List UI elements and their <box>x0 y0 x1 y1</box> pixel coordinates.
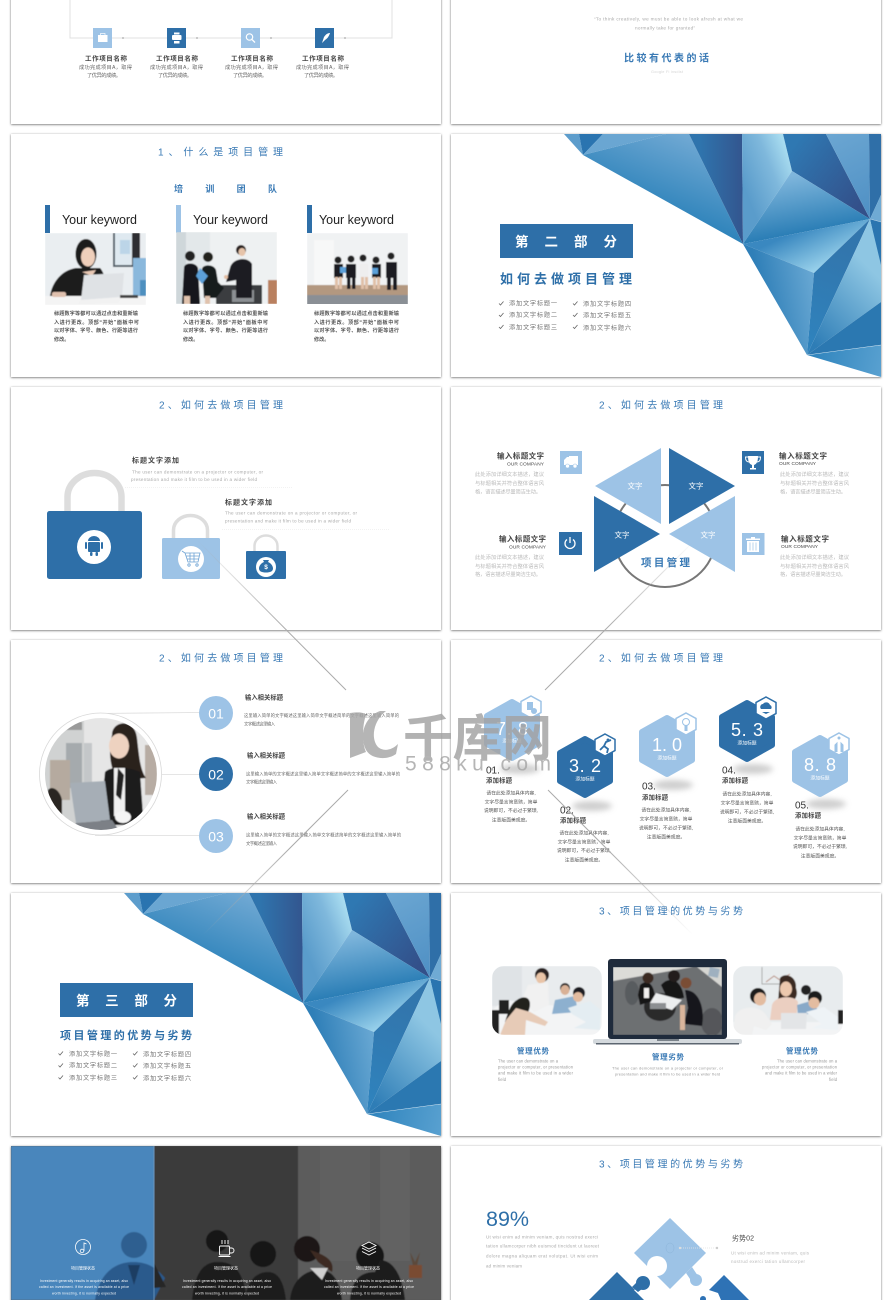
caption centre: The user can demonstrate on a projector or computer, or <box>612 1066 724 1070</box>
text: project item 2: 工作项目名称 <box>156 54 198 62</box>
text: bottom right: 输入标题文字 <box>781 534 830 544</box>
text: project item 4: 工作项目名称 <box>302 54 344 62</box>
column 2 text: called an investment. If the asset is available at a price <box>182 1285 272 1289</box>
caption centre: presentation and make it film to be used in a wider field <box>615 1072 720 1076</box>
text: project item 2 <box>150 54 203 79</box>
title: 2、如何去做项目管理 <box>159 398 283 412</box>
text: project item 1 <box>79 54 132 79</box>
big stat: 89% <box>486 1207 529 1231</box>
description 2 <box>183 310 269 343</box>
caption right: field <box>829 1077 838 1082</box>
text: bottom left: 输入标题文字 <box>499 534 546 544</box>
text: top left: 与标题相关并符合整体语言风 <box>475 479 545 487</box>
text: top left <box>475 450 545 496</box>
subtitle: 培训团队 <box>174 183 277 194</box>
text block 2: 标题文字添加 <box>225 498 272 506</box>
triangle diagram: 文字 <box>614 530 630 540</box>
column 1 text <box>39 1264 129 1296</box>
text: project item 4: 成功完成项目A，取得 <box>296 63 349 71</box>
item 04 text: 文字尽量言简意赅，简单 <box>721 800 774 806</box>
photo: team with laptop right <box>733 966 843 1035</box>
title: 3、项目管理的优势与劣势 <box>599 904 743 918</box>
icon: coffee cup <box>218 1240 234 1256</box>
stat description: Ut wisi enim ad minim veniam, quis nostrud exerci <box>486 1234 598 1240</box>
item 3 text <box>246 812 401 847</box>
photo: woman at laptop <box>45 233 146 305</box>
heading: 比较有代表的话 <box>624 52 709 64</box>
badge 03 <box>199 819 233 853</box>
caption right: 管理优势 <box>786 1046 818 1056</box>
watermark logo <box>350 699 552 776</box>
panel: triangle cycle slide <box>451 387 881 630</box>
item 01 text <box>484 766 538 824</box>
description 3: 标题数字等都可以通过点击和重新输 <box>314 310 400 317</box>
text block 2: presentation and make it film to be used in a wider field <box>225 518 351 524</box>
hexagon 7.8: 添加标题 <box>502 738 522 744</box>
item 03 text: 注意版面美观度。 <box>647 834 685 840</box>
text: bottom right <box>780 534 850 578</box>
icon: briefcase <box>93 28 112 48</box>
text: top left: 格，语言描述尽量简洁生动。 <box>475 488 541 496</box>
item 05 text: 请在此处添加具体内容, <box>795 826 845 832</box>
item 03 text: 请在此处添加具体内容, <box>641 806 691 814</box>
text: project item 1: 成功完成项目A，取得 <box>79 63 132 71</box>
icon: shopping cart <box>182 551 200 566</box>
section title: 如何去做项目管理 <box>500 272 632 286</box>
panel: quote slide (top right) <box>451 0 881 124</box>
column 2 text: Investment generally results in acquiring an asset, also <box>183 1279 271 1283</box>
hexagon 1.0 <box>642 713 696 774</box>
item 2 text: 文字概述这里输入 <box>246 778 278 786</box>
text: top right <box>779 450 850 496</box>
item 01 text: 请在此处添加具体内容, <box>486 790 536 796</box>
checklist: 添加文字标题二 <box>509 311 557 319</box>
icon: magnifier <box>241 28 260 48</box>
text: bottom right: 格，语言描述尽量简洁生动。 <box>780 570 846 578</box>
triangle diagram: 文字 <box>628 480 642 490</box>
hexagon 8.8: 添加标题 <box>810 774 830 782</box>
stat description: dolore magna aliquam erat volutpat. Ut wisi enim <box>486 1254 598 1258</box>
hexagon 3.2: 添加标题 <box>575 776 595 782</box>
icon: trash <box>742 533 764 555</box>
item 01 text: 说明即可，不必过于繁琐, <box>484 807 538 814</box>
panel: advantages slide <box>451 893 881 1136</box>
item 04 text: 说明即可，不必过于繁琐, <box>720 808 774 816</box>
badge 02: 02 <box>208 766 224 782</box>
caption centre <box>612 1052 724 1076</box>
card 1 <box>45 205 146 305</box>
hexagon 1.0: 1. 0 <box>652 735 682 755</box>
text: top left: 输入标题文字 <box>497 450 544 460</box>
caption right: projector or computer, or presentation <box>762 1064 838 1070</box>
text: bottom right: 与标题相关并符合整体语言风 <box>780 562 850 570</box>
hexagon 5.3 <box>722 697 776 759</box>
item 02 text: 说明即可，不必过于繁琐, <box>557 847 611 854</box>
text block 1: 标题文字添加 <box>132 456 179 464</box>
callout 02: 劣势02 <box>732 1234 754 1242</box>
text: top right: 输入标题文字 <box>779 450 828 460</box>
item 05 text: 文字尽量言简意赅，简单 <box>794 834 847 842</box>
caption right <box>762 1046 838 1082</box>
caption left: The user can demonstrate on a <box>498 1058 559 1064</box>
checklist: 添加文字标题四 <box>143 1050 191 1058</box>
flow arrow dots <box>122 37 346 39</box>
item 05 text <box>793 800 847 860</box>
triangle diagram: 文字 <box>700 530 716 540</box>
text: project item 1: 工作项目名称 <box>85 54 128 62</box>
column 2 text: 项目管理状态 <box>214 1264 238 1270</box>
text: bottom left <box>475 534 547 578</box>
title: 2、如何去做项目管理 <box>159 652 283 664</box>
checklist: 添加文字标题三 <box>509 324 557 332</box>
item 02 text: 请在此处添加具体内容, <box>559 830 609 836</box>
text: bottom left: OUR COMPANY <box>509 544 547 550</box>
text: top right: 与标题相关并符合整体语言风 <box>780 479 850 487</box>
panel: section two cover <box>451 134 881 377</box>
hexagon 5.3: 添加标题 <box>737 740 757 746</box>
description 1: 标题数字等都可以通过点击和重新输 <box>54 310 139 317</box>
item 1 text <box>244 692 399 728</box>
stat description <box>486 1234 600 1268</box>
item 02 text: 文字尽量言简意赅，简单 <box>558 838 611 846</box>
icon: layers <box>362 1242 376 1255</box>
description 3: 修改。 <box>314 336 329 343</box>
text: top right: OUR COMPANY <box>779 461 817 467</box>
panel: dark photo slide <box>11 1146 441 1300</box>
checklist: 添加文字标题五 <box>143 1062 191 1070</box>
hexagon 8.8 <box>795 733 849 794</box>
item 05 text: 注意版面美观度。 <box>801 852 839 860</box>
title: 3、项目管理的优势与劣势 <box>599 1158 743 1170</box>
item 05 text: 添加标题 <box>795 810 822 820</box>
watermark logo: 千库网 <box>403 699 552 771</box>
text: project item 3: 成功完成项目A，取得 <box>225 63 278 71</box>
callout 02 <box>731 1234 810 1264</box>
section tag: 第三部分 <box>76 992 178 1008</box>
item 02 text: 注意版面美观度。 <box>565 856 603 864</box>
column 2 text <box>182 1264 272 1296</box>
text block 2 <box>222 498 390 530</box>
badge 02 <box>199 757 233 791</box>
text: top right: 此处添加详细文本描述，建议 <box>780 470 850 478</box>
photo: candidates on chairs <box>307 233 408 305</box>
item 03 text <box>639 782 693 840</box>
text block 1: presentation and make it film to be used in a wider field <box>131 477 257 482</box>
caption left: field <box>498 1077 507 1082</box>
item 01 text: 文字尽量言简意赅，简单 <box>485 798 538 806</box>
polygon artwork <box>124 893 441 1136</box>
caption left: and make it film to be used in a wider <box>498 1070 574 1076</box>
icon: feather <box>315 28 334 48</box>
column 1 text: Investment generally results in acquiring an asset, also <box>40 1279 128 1283</box>
watermark logo: 588ku.com <box>405 752 551 776</box>
column 3 text: 项目管理状态 <box>356 1264 380 1270</box>
checklist: 添加文字标题一 <box>69 1050 117 1058</box>
hexagon 7.8: 7. 8 <box>496 719 528 739</box>
text: project item 1: 了优异的成绩。 <box>87 71 121 79</box>
icon: trophy <box>742 451 764 474</box>
item 02 text <box>557 806 611 864</box>
connector lines <box>95 712 199 836</box>
item 02 text: 02. <box>560 806 574 816</box>
description 2: 标题数字等都可以通过点击和重新输 <box>183 310 269 317</box>
column 1 text: worth investing, it is normally expected <box>52 1292 116 1296</box>
checklist: 添加文字标题三 <box>69 1074 117 1082</box>
text: top right: 格，语言描述尽量简洁生动。 <box>780 488 846 496</box>
watermark diagonal lines <box>197 540 694 935</box>
hexagon 1.0: 添加标题 <box>657 754 677 762</box>
title: 1、什么是项目管理 <box>158 146 283 158</box>
item 04 text: 添加标题 <box>722 776 749 784</box>
panel: what is project management <box>11 134 441 377</box>
item 3 text: 这里输入简单的文字概述这里输入简单文字概述简单的文字概述这里输入简单的 <box>246 832 401 838</box>
text: project item 2: 成功完成项目A，取得 <box>150 63 203 71</box>
checklist: 添加文字标题六 <box>143 1074 191 1082</box>
checklist <box>499 300 631 332</box>
hexagon shadows <box>500 764 846 811</box>
panel: hexagon stats slide <box>451 640 881 883</box>
checklist: 添加文字标题一 <box>509 300 557 308</box>
item 2 text: 这里输入简单的文字概述这里输入简单文字概述简单的文字概述这里输入简单的 <box>246 770 400 778</box>
description 1: 以对字体、字号、颜色、行距等进行 <box>54 327 138 334</box>
section tag <box>60 983 193 1017</box>
section tag <box>500 224 633 258</box>
callout 02: Ut wisi enim ad minim veniam, quis <box>731 1250 810 1256</box>
callout 02: nostrud exerci tation ullamcorper <box>731 1259 806 1264</box>
title: 2、如何去做项目管理 <box>599 398 723 412</box>
column 1 text: 项目管理状态 <box>71 1264 95 1270</box>
text: bottom left: 格，语言描述尽量简洁生动。 <box>475 570 541 578</box>
ring <box>614 485 716 587</box>
icon: music note <box>76 1240 90 1254</box>
description 2: 入进行更改。顶部“开始”面板中可 <box>183 319 268 326</box>
panel: section three cover <box>11 893 441 1136</box>
hexagon 7.8 <box>487 696 541 758</box>
text: top left: 此处添加详细文本描述，建议 <box>475 470 545 478</box>
hexagon 3.2: 3. 2 <box>569 756 601 776</box>
panel: padlocks slide <box>11 387 441 630</box>
card 3: Your keyword <box>319 213 394 227</box>
icon: power <box>559 532 582 555</box>
badge 03: 03 <box>208 828 224 844</box>
description 1 <box>54 310 139 343</box>
panel: portrait slide <box>11 640 441 883</box>
description 3: 入进行更改。顶部“开始”面板中可 <box>314 319 399 326</box>
photo background <box>11 1146 441 1300</box>
item 03 text: 添加标题 <box>642 792 669 802</box>
card 1: Your keyword <box>62 213 137 227</box>
text: bottom left: 与标题相关并符合整体语言风 <box>475 562 545 570</box>
item 01 text: 添加标题 <box>486 776 513 784</box>
item 04 text: 注意版面美观度。 <box>728 818 766 824</box>
item 05 text: 05. <box>795 800 809 812</box>
attribution: Google Fi insdist <box>651 70 684 74</box>
icon: android <box>85 536 103 556</box>
description 1: 修改。 <box>54 336 69 343</box>
panel: puzzle slide <box>451 1146 881 1300</box>
icon: money bag: $ <box>264 564 268 571</box>
text: project item 2: 了优异的成绩。 <box>158 71 192 79</box>
item 1 text: 这里输入简单的文字概述这里输入简单文字概述简单的文字概述这里输入简单的 <box>244 712 399 719</box>
description 2: 修改。 <box>183 336 198 343</box>
quote text: “To think creatively, we must be able to look afresh at what we <box>594 16 743 22</box>
photo: business handshake <box>176 232 277 304</box>
card 2: Your keyword <box>193 213 268 227</box>
text: project item 3: 工作项目名称 <box>231 54 274 62</box>
quote text: normally take for granted” <box>635 26 695 30</box>
description 2: 以对字体、字号、颜色、行距等进行 <box>183 327 268 334</box>
section tag: 第二部分 <box>515 234 618 250</box>
text: bottom left: 此处添加详细文本描述，建议 <box>475 553 545 561</box>
checklist <box>58 1050 191 1082</box>
text: bottom right: OUR COMPANY <box>781 544 819 550</box>
item 1 text: 输入相关标题 <box>245 692 284 702</box>
section title: 项目管理的优势与劣势 <box>60 1028 192 1042</box>
item 05 text: 说明即可，不必过于繁琐, <box>793 843 847 850</box>
triangle diagram <box>594 448 735 572</box>
item 01 text: 注意版面美观度。 <box>492 816 530 824</box>
title: 2、如何去做项目管理 <box>599 652 723 664</box>
item 01 text: 01. <box>486 766 500 776</box>
stat description: tation ullamcorper nibh euismod tincidunt ut laoreet <box>486 1244 600 1248</box>
card 3 <box>307 205 408 305</box>
item 1 text: 文字概述这里输入 <box>244 720 276 728</box>
description 3 <box>314 310 400 343</box>
hexagon 3.2 <box>560 734 615 795</box>
checklist: 添加文字标题四 <box>583 300 631 308</box>
caption centre: 管理劣势 <box>652 1052 684 1062</box>
checklist: 添加文字标题六 <box>583 324 631 332</box>
badge 01: 01 <box>208 706 224 722</box>
item 03 text: 说明即可，不必过于繁琐, <box>639 824 693 832</box>
item 2 text <box>246 750 400 786</box>
column 3 text: Investment generally results in acquiring an asset, also <box>325 1279 413 1283</box>
caption left: projector or computer, or presentation <box>498 1064 574 1070</box>
item 3 text: 文字概述这里输入 <box>246 840 278 847</box>
text block 1 <box>125 456 293 488</box>
item 02 text: 添加标题 <box>560 816 587 824</box>
centre label: 项目管理 <box>641 556 690 569</box>
checklist: 添加文字标题五 <box>583 312 631 320</box>
stat description: ad minim veniam <box>486 1264 522 1268</box>
caption left: 管理优势 <box>517 1046 550 1056</box>
text: project item 4: 了优异的成绩。 <box>304 71 338 79</box>
column 3 text <box>324 1264 414 1296</box>
quote text <box>594 16 743 30</box>
column 3 text: worth investing, it is normally expected <box>337 1292 401 1296</box>
item 04 text <box>720 766 774 824</box>
item 04 text: 04. <box>722 766 736 776</box>
description 3: 以对字体、字号、颜色、行距等进行 <box>314 327 399 334</box>
polygon artwork <box>564 134 881 377</box>
checklist: 添加文字标题二 <box>69 1062 117 1070</box>
icon: truck <box>560 451 582 474</box>
photo: team at table left <box>492 966 602 1035</box>
large lock <box>47 473 142 579</box>
text block 2: The user can demonstrate on a projector or computer, or <box>225 510 357 516</box>
small lock <box>246 536 286 579</box>
caption right: The user can demonstrate on a <box>777 1058 838 1064</box>
hexagon 8.8: 8. 8 <box>804 755 836 775</box>
badge 01 <box>199 696 233 730</box>
puzzle graphic <box>589 1218 749 1300</box>
caption left <box>498 1046 574 1082</box>
column 1 text: called an investment. If the asset is available at a price <box>39 1285 129 1289</box>
medium lock <box>162 516 220 579</box>
photo: portrait circle <box>40 713 162 835</box>
text: project item 3: 了优异的成绩。 <box>233 71 267 79</box>
triangle diagram: 文字 <box>688 480 704 490</box>
item 3 text: 输入相关标题 <box>247 812 286 820</box>
text: project item 4 <box>296 54 349 79</box>
text: top left: OUR COMPANY <box>507 462 545 468</box>
panel: workflow slide (top left) <box>11 0 441 124</box>
column 2 text: worth investing, it is normally expected <box>195 1292 259 1296</box>
card 2 <box>176 205 277 304</box>
item 2 text: 输入相关标题 <box>247 750 286 760</box>
caption right: and make it film to be used in a wider <box>765 1070 838 1076</box>
hexagon 5.3: 5. 3 <box>731 720 763 740</box>
text block 1: The user can demonstrate on a projector or computer, or <box>132 470 263 474</box>
text: bottom right: 此处添加详细文本描述，建议 <box>780 553 850 561</box>
photo: laptop mockup <box>593 959 742 1044</box>
icon: printer <box>167 28 186 48</box>
description 1: 入进行更改。顶部“开始”面板中可 <box>54 319 139 326</box>
item 04 text: 请在此处添加具体内容, <box>722 790 772 798</box>
item 03 text: 03. <box>642 782 656 792</box>
column 3 text: called an investment. If the asset is available at a price <box>324 1285 414 1289</box>
item 03 text: 文字尽量言简意赅，简单 <box>640 816 693 822</box>
text: project item 3 <box>225 54 278 79</box>
